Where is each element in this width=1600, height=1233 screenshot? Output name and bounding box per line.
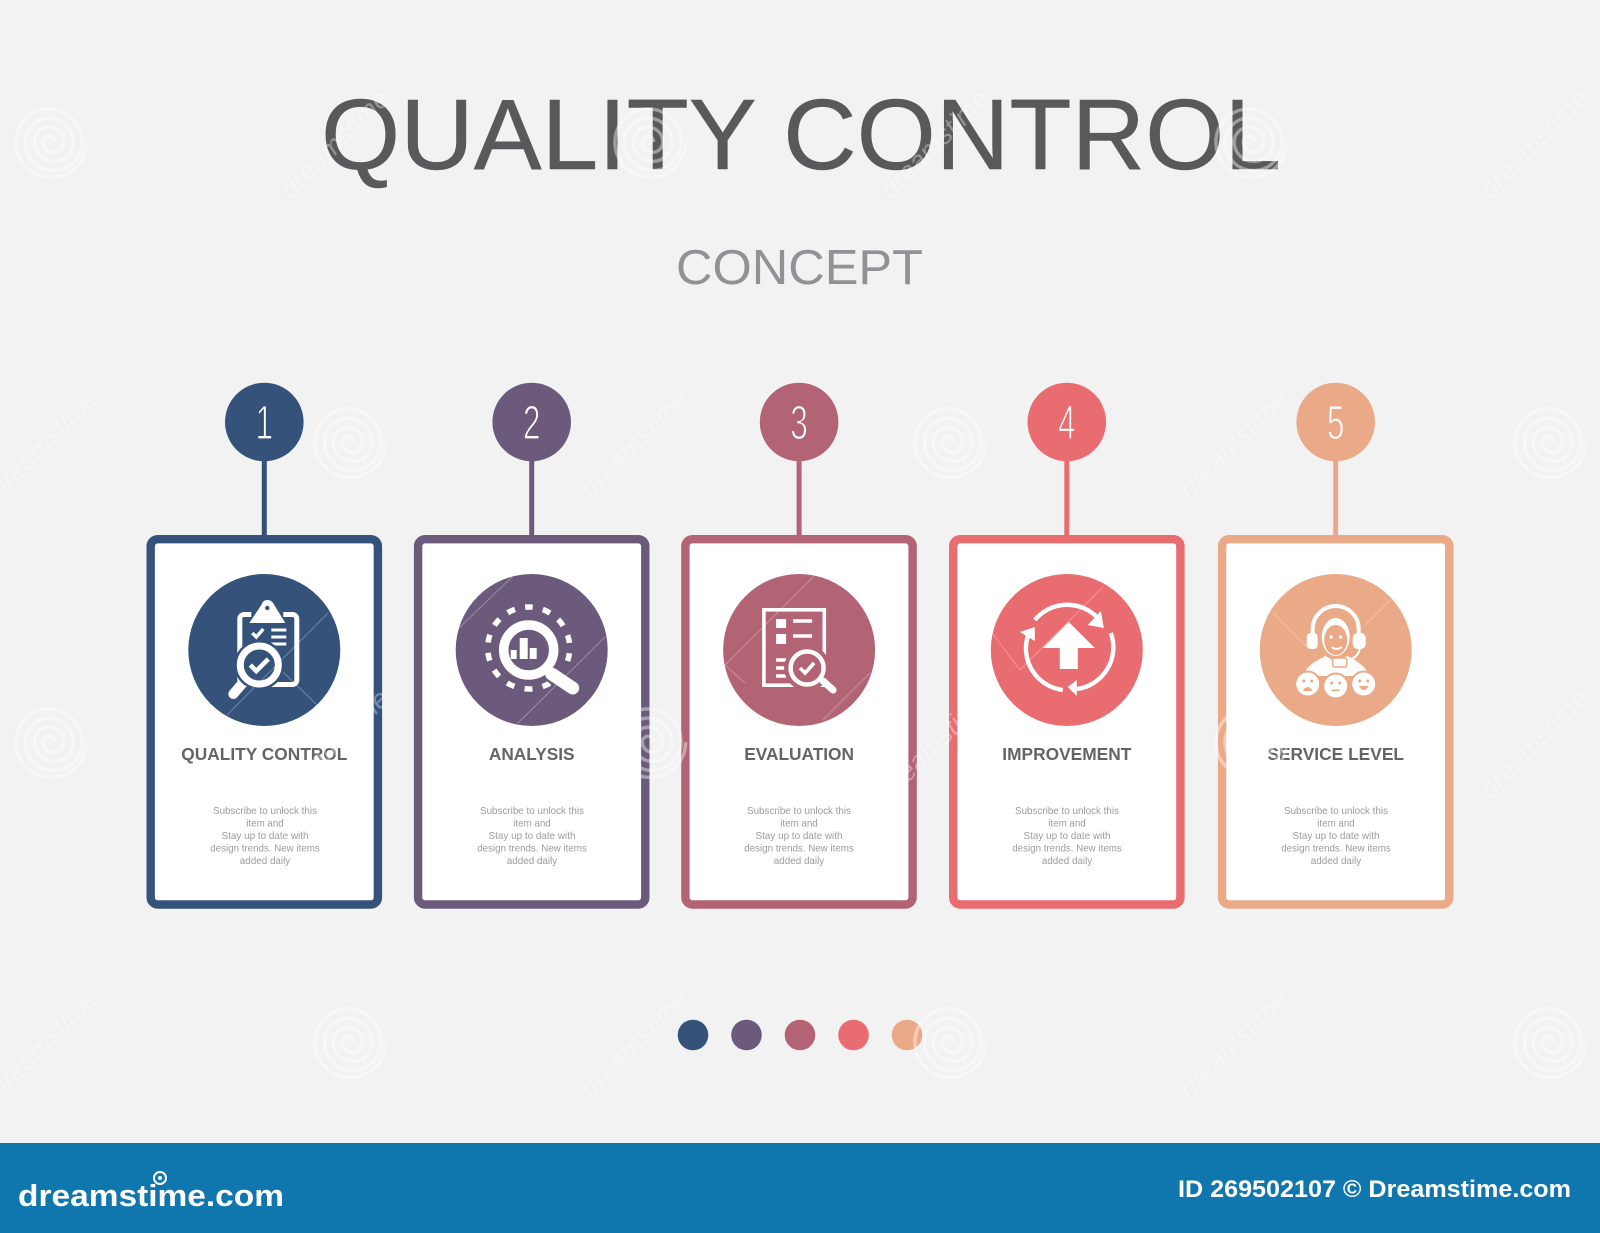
number badge 1: 1 [255, 395, 273, 450]
card body text 1: item and [246, 818, 284, 830]
icon: magnifier over bar chart [456, 574, 608, 726]
number badge 5: 5 [1327, 395, 1345, 450]
card body text 4: Stay up to date with [1024, 831, 1110, 842]
title: QUALITY CONTROL [321, 79, 1281, 191]
card body text 2: Subscribe to unlock this [480, 806, 584, 817]
watermark overlay: dreamstime [874, 83, 995, 204]
card body text 1: added daily [240, 856, 291, 867]
card frame 5 [1222, 539, 1449, 904]
card body text 4: item and [1048, 818, 1086, 830]
watermark overlay: dreamstime [1473, 683, 1594, 804]
panel: step 5 service level [1222, 383, 1449, 904]
card body text 5: added daily [1311, 856, 1362, 867]
card body text 5: item and [1317, 818, 1355, 830]
number badge 5 [1296, 383, 1375, 540]
number badge 3: 3 [790, 395, 808, 450]
card body text 3: item and [780, 818, 818, 830]
watermark overlay: dreamstime [274, 83, 395, 204]
card frame 3 [685, 539, 913, 904]
footer logo: dreamstime.com [18, 1178, 284, 1213]
card frame 1 [151, 539, 378, 904]
watermark overlay: dreamstime [1173, 983, 1294, 1104]
card heading 2: ANALYSIS [489, 744, 574, 764]
card body text 5 [1281, 806, 1391, 867]
card body text 3: design trends. New items [744, 844, 854, 854]
card heading 1: QUALITY CONTROL [181, 744, 348, 764]
card body text 5: design trends. New items [1281, 844, 1391, 854]
panel: step 1 quality control [151, 383, 378, 904]
card body text 3: Subscribe to unlock this [747, 806, 851, 817]
watermark overlay: dreamstime [1473, 83, 1594, 204]
card body text 2: design trends. New items [477, 844, 587, 854]
number badge 4: 4 [1058, 395, 1076, 450]
card body text 5: Subscribe to unlock this [1284, 806, 1388, 817]
card body text 2 [477, 806, 587, 867]
watermark overlay: dreamstime [574, 983, 695, 1104]
card heading 5: SERVICE LEVEL [1267, 744, 1404, 764]
card heading 3: EVALUATION [744, 744, 854, 764]
subtitle: CONCEPT [676, 241, 923, 295]
watermark overlay: dreamstime [874, 683, 995, 804]
card body text 3: Stay up to date with [756, 831, 842, 842]
panel: step 4 improvement [953, 383, 1180, 904]
card body text 4: Subscribe to unlock this [1015, 806, 1119, 817]
watermark overlay: dreamstime [1173, 383, 1294, 504]
card body text 1: Subscribe to unlock this [213, 806, 317, 817]
card body text 5: Stay up to date with [1292, 831, 1380, 842]
card body text 3: added daily [774, 856, 825, 867]
number badge 3 [760, 383, 838, 540]
watermark overlay: dreamstime [574, 383, 695, 504]
card body text 2: Stay up to date with [488, 831, 576, 842]
watermark overlay: dreamstime [274, 683, 395, 804]
card body text 2: item and [513, 818, 551, 830]
card frame 4 [953, 539, 1180, 904]
panel: step 2 analysis [418, 383, 645, 904]
panel: step 3 evaluation [685, 383, 913, 904]
icon: document with magnifier [723, 574, 875, 726]
icon: up arrow in circular arrows [991, 574, 1143, 726]
footer image id credit: ID 269502107 © Dreamstime.com [1178, 1176, 1571, 1203]
card body text 1: Stay up to date with [222, 831, 308, 842]
card frame 2 [418, 539, 645, 904]
card body text 3 [744, 806, 854, 867]
number badge 1 [225, 383, 304, 540]
icon: support agent with smileys [1260, 574, 1412, 726]
icon: clipboard with magnifier [188, 574, 340, 726]
card body text 1: design trends. New items [210, 844, 320, 854]
card body text 4 [1012, 806, 1122, 867]
card body text 1 [210, 806, 320, 867]
card body text 4: design trends. New items [1012, 844, 1122, 854]
footer band [0, 1143, 1600, 1233]
number badge 4 [1028, 383, 1106, 540]
card body text 4: added daily [1042, 856, 1093, 867]
number badge 2: 2 [523, 395, 541, 450]
card heading 4: IMPROVEMENT [1002, 744, 1132, 764]
number badge 2 [492, 383, 571, 540]
card body text 2: added daily [507, 856, 558, 867]
pagination dots [678, 1020, 922, 1050]
